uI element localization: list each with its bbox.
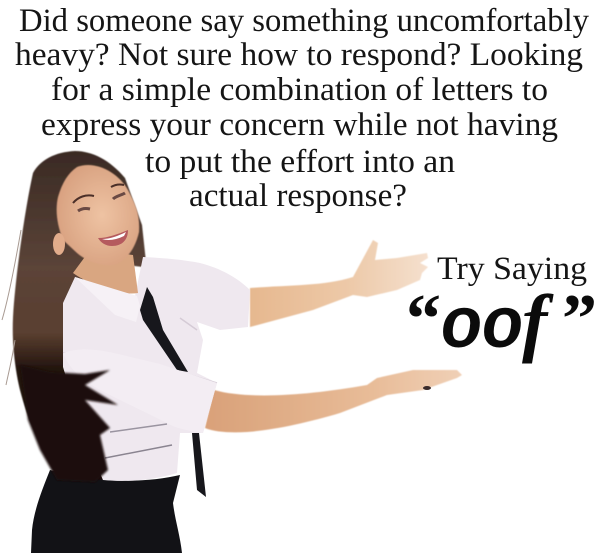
call to action: oof: f: [522, 280, 554, 364]
call to action: oof: oo: [441, 283, 523, 363]
smile: [98, 230, 128, 246]
ring: [423, 386, 431, 390]
woman presenter figure: [2, 151, 462, 553]
hair: [13, 151, 146, 482]
skirt: [31, 470, 182, 553]
dark hair swoosh over shirt: [20, 365, 118, 482]
heading text block: express your concern while not having: [41, 107, 558, 143]
stray hair strand: [2, 230, 21, 385]
call to action: try saying: Try Saying: [437, 251, 587, 287]
shirt folds: [63, 318, 217, 458]
heading text block: to put the effort into an: [145, 144, 455, 180]
call to action: oof: ”: [562, 281, 597, 358]
face: [57, 165, 139, 265]
heading text block: for a simple combination of letters to: [51, 72, 548, 108]
heading text block: actual response?: [189, 178, 407, 214]
collar: [75, 277, 140, 322]
neck: [73, 250, 138, 293]
forward arm sleeve: [63, 349, 217, 433]
heading text block: Did someone say something uncomfortably: [19, 3, 589, 39]
heading text block: [15, 3, 589, 214]
shirt body: [63, 257, 250, 481]
eyebrows and eyes: [73, 184, 125, 211]
ear: [53, 233, 65, 255]
call to action: oof: “: [406, 281, 441, 358]
upper arm skin: [250, 240, 428, 327]
call to action: oof: [406, 280, 597, 364]
heading text block: heavy? Not sure how to respond? Looking: [15, 37, 583, 73]
tie: [140, 287, 206, 497]
lower arm skin: [205, 370, 462, 432]
